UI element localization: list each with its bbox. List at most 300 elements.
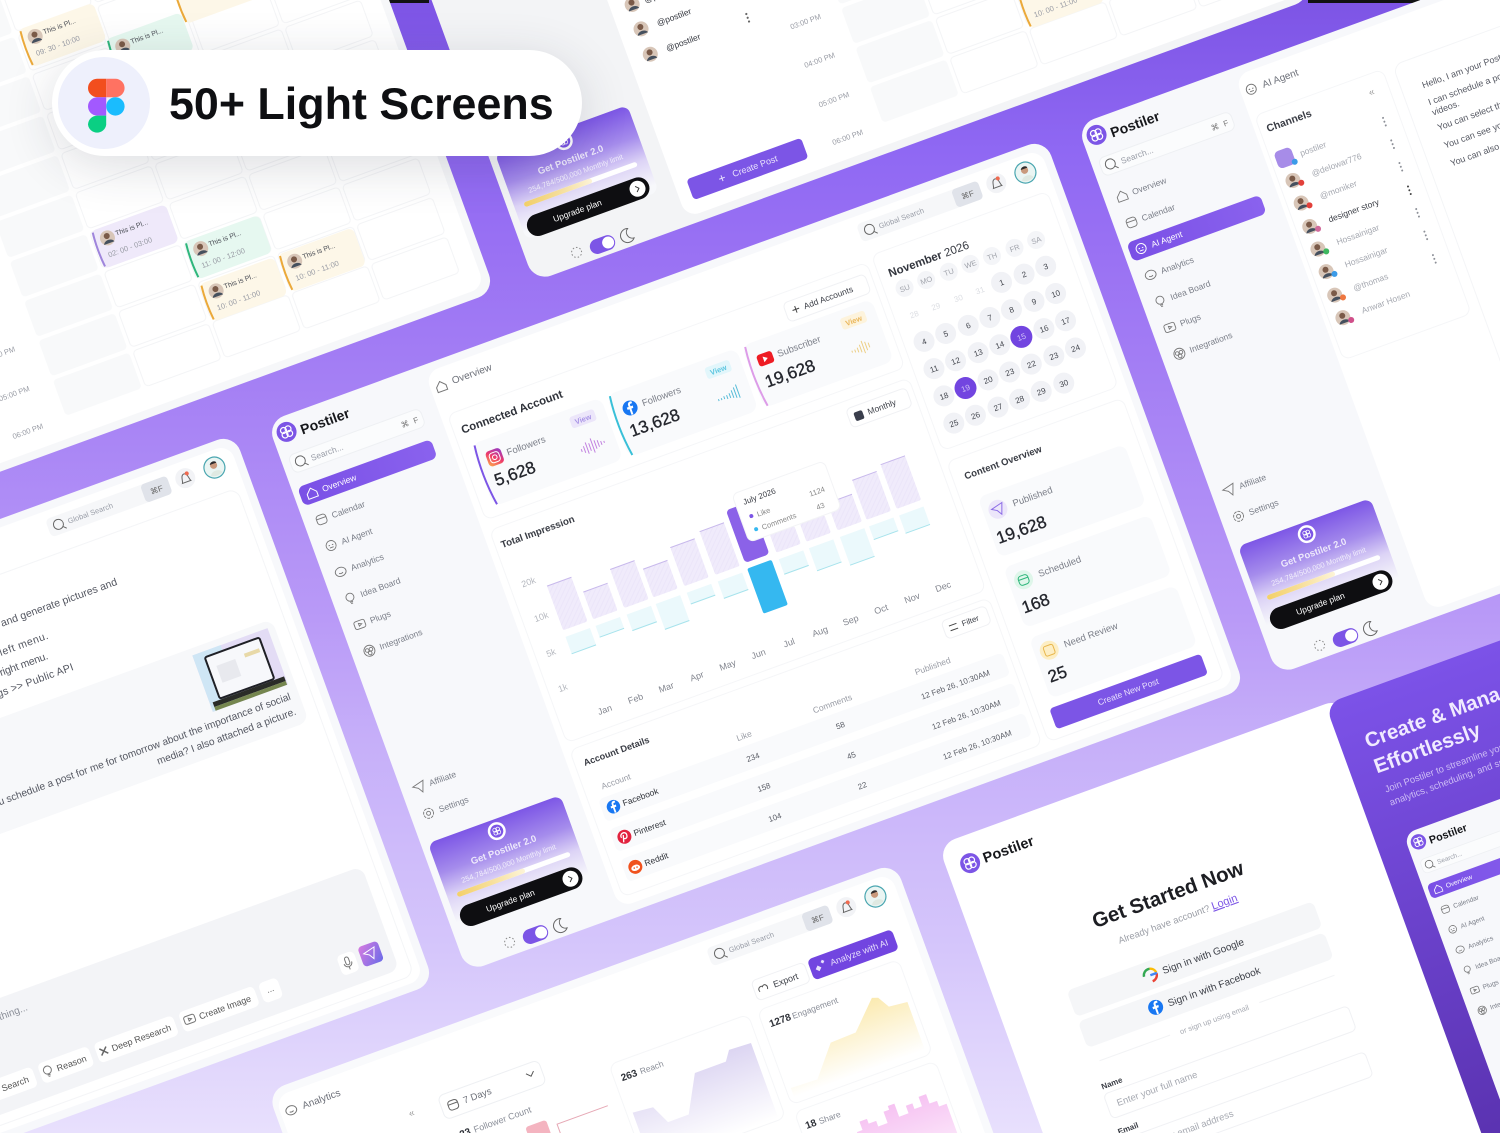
upgrade card: Get Postiler 2.0 <box>1279 536 1348 570</box>
instagram card: 5,628 <box>492 458 538 490</box>
scheduled tile: Scheduled <box>1037 554 1083 580</box>
day numbers <box>909 261 1092 429</box>
badge: 50+ Light Screens pill: 50+ Light Screens <box>169 79 554 129</box>
upgrade card <box>1238 498 1402 634</box>
channel rows: @moniker <box>1318 178 1358 201</box>
row menus <box>1382 117 1437 264</box>
day numbers: 26 <box>970 410 982 422</box>
mini dashboard sidebar: Plugs <box>1482 979 1500 991</box>
mini dashboard sidebar: Postiler <box>1428 822 1470 847</box>
mini dashboard sidebar: Analytics <box>1467 935 1495 951</box>
event: yellow 10:00 right: 10: 00 - 11:00 <box>294 259 340 283</box>
event: yellow 09:30: This is Pl... <box>42 18 77 36</box>
export button <box>751 962 811 1001</box>
weekday pills: SA <box>1030 234 1043 246</box>
channel rows: Anwar Hosen <box>1360 289 1412 316</box>
channel rows: @thomas <box>1352 271 1390 293</box>
day numbers: 27 <box>992 402 1004 413</box>
month labels: Sep <box>841 613 860 628</box>
channel rows: designer story <box>1327 196 1381 224</box>
menu items: Idea Board <box>1169 278 1212 302</box>
month labels: Nov <box>903 590 922 605</box>
collapse control: « <box>407 1107 417 1120</box>
day numbers: 11 <box>929 363 940 375</box>
panel: content overview <box>947 398 1224 742</box>
table header: Account <box>600 771 633 791</box>
published tile: 19,628 <box>994 512 1049 548</box>
header breadcrumb <box>1245 67 1300 97</box>
create new post button: Create New Post <box>1096 676 1161 707</box>
tooltip: 43 <box>815 501 826 512</box>
row: facebook: 58 <box>835 720 847 731</box>
purple promo panel <box>1325 533 1500 1133</box>
channels list: Channels <box>1265 107 1314 135</box>
create post button <box>686 138 808 200</box>
published tile <box>978 444 1146 558</box>
table header: Comments <box>811 692 853 715</box>
menu items: Settings <box>1247 497 1280 517</box>
channel rows <box>1273 124 1415 328</box>
mini dashboard sidebar: Overview <box>1445 874 1474 890</box>
upgrade card: Upgrade plan <box>1295 590 1346 617</box>
y axis labels <box>519 575 576 694</box>
table header <box>600 655 952 792</box>
name field: Enter your full name <box>1115 1070 1199 1109</box>
channel rows: postiler <box>1298 139 1328 158</box>
upgrade card <box>428 795 592 931</box>
top search bar <box>45 454 228 538</box>
day numbers: 22 <box>1026 359 1038 370</box>
upgrade card: Upgrade plan <box>485 887 536 914</box>
need review tile: Need Review <box>1063 621 1120 650</box>
need review tile: 25 <box>1045 662 1070 687</box>
row: pinterest: 158 <box>756 781 772 794</box>
row: reddit <box>626 724 1013 876</box>
panel: calendar view top left: 06:00 PM <box>11 422 44 441</box>
upgrade card: 254,784/500,000 Monthly limit <box>460 842 558 885</box>
sidebar search: ⌘ <box>1210 122 1220 133</box>
event: purple 02:00: This is Pl... <box>115 219 149 238</box>
day numbers: 20 <box>983 374 994 386</box>
badge: 50+ Light Screens pill <box>52 50 582 156</box>
y axis labels: 10k <box>533 610 550 624</box>
menu items: Overview <box>1131 175 1168 197</box>
day numbers: 15 <box>1016 331 1028 343</box>
month labels: Jan <box>596 703 613 717</box>
day numbers: 18 <box>938 390 950 402</box>
menu items: AI Agent <box>340 526 374 546</box>
theme toggle <box>503 917 568 953</box>
header breadcrumb: Analytics <box>301 1088 342 1112</box>
event: yellow 10:00: This is Pl... <box>223 272 258 291</box>
panel: sign up screen <box>938 533 1500 1133</box>
filter button <box>941 605 992 639</box>
google sign in <box>1067 901 1322 1017</box>
menu items <box>314 495 483 820</box>
day numbers: 5 <box>942 329 950 339</box>
day numbers: 12 <box>950 355 962 367</box>
upgrade card: 254,784/500,000 Monthly limit <box>527 152 625 195</box>
day numbers: 30 <box>953 293 965 304</box>
panel: total impression chart <box>490 378 986 743</box>
event: yellow 09:30: 09: 30 - 10:00 <box>35 34 81 58</box>
menu items: Settings <box>437 794 470 814</box>
row: reddit: 22 <box>857 780 869 792</box>
time labels: 03:00 PM <box>789 12 822 31</box>
panel: connected account <box>447 262 905 520</box>
day numbers: 30 <box>1058 378 1070 389</box>
name field <box>1099 994 1357 1119</box>
tooltip: 1124 <box>808 485 826 499</box>
day numbers: 16 <box>1038 323 1050 335</box>
tooltip <box>732 461 841 542</box>
brand logo <box>957 831 1037 876</box>
sidebar search: ⌘ <box>400 419 410 430</box>
youtube card: View <box>844 314 863 328</box>
day numbers: 28 <box>909 309 921 320</box>
sidebar search: F <box>412 415 420 426</box>
sidebar search: Search... <box>309 442 345 463</box>
tooltip: Like <box>756 505 772 519</box>
month labels: Oct <box>873 602 890 616</box>
row: facebook <box>605 664 991 816</box>
event: green 11:00 <box>183 215 272 280</box>
facebook card <box>606 348 759 457</box>
weekday pills <box>893 228 1048 299</box>
channel badges <box>1290 158 1356 324</box>
user message bubble <box>0 619 309 879</box>
published tile: Published <box>1011 485 1054 509</box>
share chart <box>794 1061 973 1133</box>
bar top strokes <box>547 456 911 603</box>
panel: main overview dashboard <box>267 139 1245 972</box>
day numbers: 10 <box>1050 288 1062 300</box>
month labels: Dec <box>934 579 953 594</box>
share chart: Share <box>817 1109 842 1126</box>
active menu item <box>297 439 438 506</box>
facebook sign in: Sign in with Facebook <box>1167 965 1263 1009</box>
day numbers: 23 <box>1004 367 1016 378</box>
engagement chart <box>757 960 933 1105</box>
day circles <box>901 253 1099 437</box>
google sign in: Sign in with Google <box>1161 937 1246 977</box>
row: facebook: 234 <box>745 751 761 764</box>
day numbers: 4 <box>921 337 928 347</box>
mini dashboard sidebar: Search... <box>1436 850 1463 866</box>
like bars <box>547 456 921 630</box>
analyze with AI button <box>807 929 899 980</box>
reach chart: Reach <box>638 1058 665 1076</box>
top search bar: Global Search <box>66 501 114 526</box>
month labels: Apr <box>689 669 705 683</box>
purple promo panel: Effortlessly <box>1371 718 1484 778</box>
day numbers: 28 <box>1014 394 1026 405</box>
event: green 11:00: 11: 00 - 12:00 <box>200 246 246 270</box>
sidebar search <box>288 408 426 474</box>
mic and send buttons <box>336 940 385 976</box>
row: reddit: 12 Feb 26, 10:30AM <box>942 728 1013 762</box>
top search bar: ⌘F <box>149 484 164 497</box>
mini dashboard sidebar <box>1403 755 1500 1133</box>
comments bars <box>565 507 934 665</box>
upgrade card: 254,784/500,000 Monthly limit <box>1270 545 1368 588</box>
y axis labels: 20k <box>520 575 538 589</box>
panel: analytics screen bottom <box>267 863 1039 1133</box>
instagram card <box>471 397 623 507</box>
upgrade card: Get Postiler 2.0 <box>469 833 538 867</box>
share chart: 18 <box>804 1118 819 1132</box>
top search bar <box>706 883 889 967</box>
heading: Account Details <box>582 735 651 768</box>
menu items: Affiliate <box>428 769 458 788</box>
need review tile <box>1029 585 1197 699</box>
tool chips: Create Image <box>198 993 252 1022</box>
instagram card: Followers <box>505 434 547 458</box>
panel: account details table <box>570 598 1042 897</box>
row: reddit: 104 <box>767 811 783 824</box>
row: facebook: Facebook <box>621 786 660 808</box>
weekday pills: SU <box>898 282 911 294</box>
reach chart: 263 <box>620 1068 639 1084</box>
facebook card: Followers <box>641 385 683 409</box>
menu items: Plugs <box>1178 312 1202 328</box>
instagram card: View <box>574 412 593 426</box>
brand logo: Postiler <box>1108 108 1162 140</box>
menu items: Integrations <box>378 627 424 652</box>
top edge dark strips <box>389 0 1420 3</box>
weekday pills: TU <box>943 266 955 278</box>
active menu item: AI Agent <box>1150 229 1184 249</box>
active menu item: Overview <box>321 472 358 494</box>
day numbers: 2 <box>1021 269 1028 280</box>
row: pinterest: 45 <box>846 750 858 762</box>
panel: AI chat screen left <box>0 434 434 1133</box>
month labels <box>596 579 953 717</box>
y axis labels: 5k <box>545 646 558 659</box>
engagement chart: 1278 <box>768 1012 793 1030</box>
active july like bar <box>726 501 769 563</box>
heading: Total Impression <box>500 514 576 551</box>
sidebar search: Search... <box>1119 145 1155 166</box>
heading: Get Started Now <box>1089 857 1247 933</box>
chat card: videos. <box>1431 98 1461 117</box>
create new post button <box>1049 654 1208 729</box>
panel: calendar screen top centre <box>334 0 1312 282</box>
login prompt: Already have account? Login <box>1117 892 1239 947</box>
name field: Name <box>1100 1075 1124 1091</box>
month title: November 2026 <box>887 240 971 280</box>
chat input box <box>0 866 399 1133</box>
follower count chart <box>458 1079 619 1133</box>
facebook card: 13,628 <box>627 405 682 441</box>
menu items: Analytics <box>349 552 385 573</box>
divider label: or sign up using email <box>1179 1003 1250 1036</box>
day numbers: 31 <box>974 285 986 296</box>
user message bubble: media? I also attached a picture. <box>156 707 298 767</box>
chat card <box>1393 0 1500 552</box>
menu items <box>1115 172 1293 523</box>
sidebar search: F <box>1222 118 1230 129</box>
top search bar: Global Search <box>877 206 925 231</box>
channel list: @postiler <box>665 31 702 53</box>
day numbers: 29 <box>1036 386 1048 398</box>
panel: calendar view top left <box>0 0 495 575</box>
month labels: Jul <box>782 636 796 649</box>
menu items: Analytics <box>1159 255 1195 276</box>
divider label <box>1098 971 1336 1065</box>
mini dashboard sidebar: AI Agent <box>1460 915 1486 930</box>
time labels <box>789 12 864 147</box>
day numbers: 14 <box>994 339 1006 351</box>
top search bar: ⌘F <box>960 189 975 202</box>
menu items: Idea Board <box>359 575 402 599</box>
sidebar search <box>1098 111 1236 177</box>
event: yellow 10:00 <box>199 257 288 322</box>
menu items: Calendar <box>330 499 366 520</box>
header breadcrumb: AI Agent <box>1261 67 1300 91</box>
event: yellow 09:30 <box>18 3 107 68</box>
row: pinterest <box>615 694 1002 846</box>
channel rows: @delowar776 <box>1310 151 1363 178</box>
tool chips: Deep Research <box>110 1023 172 1053</box>
event: green top: This is Pl... <box>130 28 164 46</box>
weekday pills: TH <box>986 251 998 262</box>
brand logo <box>1084 103 1162 149</box>
brand logo: Postiler <box>981 833 1037 867</box>
reach chart <box>609 1014 786 1133</box>
event: yellow 10:00 right <box>277 227 366 292</box>
day numbers: 6 <box>965 321 973 331</box>
month labels: Aug <box>811 624 829 639</box>
theme toggle <box>570 227 635 263</box>
event: purple 02:00: 02: 00 - 03:00 <box>107 235 153 259</box>
facebook sign in <box>1078 932 1334 1048</box>
day numbers: 24 <box>1070 343 1082 354</box>
create post button: Create Post <box>731 153 779 179</box>
day numbers: 9 <box>1031 297 1038 307</box>
sidebar <box>1084 80 1415 669</box>
tool chips <box>0 977 284 1105</box>
chat intro text <box>0 559 141 761</box>
day numbers: 13 <box>973 347 985 359</box>
time labels: 04:00 PM <box>803 50 836 70</box>
event: yellow 10:00 right: This is Pl... <box>302 243 336 261</box>
brand logo: Postiler <box>298 405 352 437</box>
row: pinterest: Pinterest <box>632 817 668 838</box>
tool chips: Search <box>0 1074 30 1093</box>
tooltip: July 2026 <box>742 486 777 507</box>
table rows <box>598 652 1032 882</box>
date selector <box>437 1060 546 1120</box>
upgrade card <box>495 105 659 241</box>
sidebar <box>274 377 605 966</box>
bar bottom strokes <box>570 518 934 665</box>
active menu item <box>1126 195 1267 262</box>
table header: Like <box>735 728 753 743</box>
row: reddit: Reddit <box>643 850 670 868</box>
channel rows: Hossainigar <box>1335 222 1381 247</box>
export button: Export <box>772 971 800 989</box>
channel list <box>623 0 752 64</box>
day numbers: 25 <box>948 418 960 429</box>
channel rows: Hossainigar <box>1343 245 1389 269</box>
event: green top <box>105 12 194 77</box>
youtube card <box>742 299 894 408</box>
channel list: @postiler <box>655 6 693 28</box>
header breadcrumb <box>284 1088 342 1118</box>
top search bar: Global Search <box>727 930 775 955</box>
day numbers: 8 <box>1008 305 1016 315</box>
month labels: May <box>718 657 738 673</box>
header breadcrumb: Overview <box>451 362 494 387</box>
time labels: 06:00 PM <box>831 128 864 147</box>
row: facebook: 12 Feb 26, 10:30AM <box>920 668 991 702</box>
weekday pills: FR <box>1008 242 1021 254</box>
tool chips: ... <box>265 983 275 995</box>
row: pinterest: 12 Feb 26, 10:30AM <box>931 698 1002 732</box>
day numbers: 7 <box>986 313 994 323</box>
tool chips: Reason <box>55 1053 88 1073</box>
monthly selector <box>846 387 913 428</box>
mini dashboard sidebar: Calendar <box>1452 894 1481 910</box>
menu items: Calendar <box>1140 202 1176 223</box>
analyze with AI button: Analyze with AI <box>829 937 889 968</box>
month labels: Jun <box>750 647 767 661</box>
scheduled tile <box>1003 515 1172 628</box>
menu items: Integrations <box>1188 330 1234 355</box>
upgrade card: Upgrade plan <box>552 197 603 224</box>
event: yellow 10:00 <box>1016 0 1105 29</box>
weekday pills: MO <box>919 274 934 287</box>
panel: calendar <box>871 191 1118 451</box>
date selector: 7 Days <box>462 1086 493 1106</box>
brand logo <box>274 400 352 446</box>
y axis labels: 1k <box>557 681 569 694</box>
time labels: 05:00 PM <box>817 90 851 109</box>
heading: Connected Account <box>460 389 565 437</box>
day numbers: 23 <box>1048 350 1060 362</box>
attached laptop image <box>192 628 288 712</box>
day numbers: 19 <box>960 383 972 394</box>
menu items: Plugs <box>368 609 392 625</box>
event: green 11:00: This is Pl... <box>208 230 242 248</box>
channels list: « <box>1367 86 1377 99</box>
event: yellow 10:00: 10: 00 - 11:00 <box>216 288 262 312</box>
day numbers: 3 <box>1042 262 1050 272</box>
monthly selector: Monthly <box>866 397 898 417</box>
month labels: Feb <box>627 691 645 706</box>
email field <box>1116 1039 1373 1133</box>
heading: Content Overview <box>963 444 1044 482</box>
icon: figma logo <box>58 57 150 149</box>
upgrade card: Get Postiler 2.0 <box>536 143 605 177</box>
add accounts button <box>783 274 871 322</box>
facebook card: View <box>709 363 728 377</box>
header breadcrumb <box>435 362 494 393</box>
month labels: Mar <box>657 680 675 695</box>
channels list <box>1255 69 1471 360</box>
tooltip: Comments <box>760 511 798 532</box>
day numbers: 1 <box>998 278 1006 288</box>
table header: Published <box>913 655 952 677</box>
active july comments bar <box>747 560 788 614</box>
youtube card: Subscriber <box>776 334 822 360</box>
menu items: Affiliate <box>1238 472 1268 491</box>
top search bar <box>856 159 1039 243</box>
event: purple 02:00 <box>90 204 179 269</box>
youtube card: 19,628 <box>762 356 818 392</box>
add accounts button: Add Accounts <box>802 284 854 311</box>
